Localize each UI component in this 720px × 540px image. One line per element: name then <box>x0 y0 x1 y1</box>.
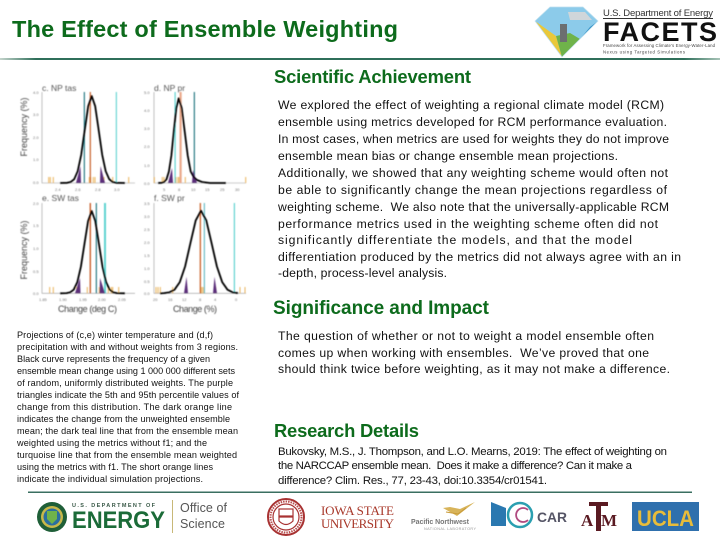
chart: d. NP pr: 8 <box>178 187 181 192</box>
logo text: tagline <box>603 43 716 54</box>
text block: figure caption: Projections of (c,e) winter temperature and (d,f) <box>17 330 213 340</box>
chart: d. NP pr: 30 <box>235 187 240 192</box>
chart: c. NP tas: 2.8 <box>95 187 101 192</box>
chart: d. NP pr: 3.0 <box>144 126 150 131</box>
text block: achievement: ensemble using metrics developed for RCM performance evaluation. <box>278 115 667 129</box>
chart: f. SW pr: 1.0 <box>144 266 150 271</box>
text block: figure caption: weighted using the metrics without f1; and the <box>16 438 207 448</box>
text block: achievement: -depth, process-level analysis. <box>278 266 447 280</box>
chart: c. NP tas: 3.0 <box>114 187 120 192</box>
chart: c. NP tas: 4.0 <box>33 90 39 95</box>
chart: f. SW pr: 3.5 <box>144 201 150 206</box>
chart: f. SW pr: 0.0 <box>144 291 150 296</box>
chart: c. NP tas <box>33 83 135 192</box>
chart: e. SW tas: 2.00 <box>98 297 107 302</box>
logo text: Office of Science: Science <box>180 517 225 531</box>
text block: achievement: be able to significantly change the mean projections regardless of <box>278 183 668 197</box>
chart: e. SW tas: 1.85 <box>39 297 48 302</box>
chart: d. NP pr: 2.0 <box>144 144 150 149</box>
chart: f. SW pr: f. SW pr <box>154 193 185 203</box>
text block: achievement: significantly differentiate the models, and that the model <box>278 233 632 247</box>
panel: charts <box>19 83 246 314</box>
text block: achievement: performance metrics used in the weighting scheme often did not <box>278 217 659 231</box>
logo: Texas A&M <box>581 502 617 531</box>
logo: DOE Office of Science <box>37 500 228 534</box>
axis label: change deg C: Change (deg C) <box>58 304 117 314</box>
heading: Scientific Achievement: Scientific Achievement <box>274 66 471 87</box>
chart: c. NP tas: 3.0 <box>33 112 39 117</box>
chart: f. SW pr: 12 <box>182 297 187 302</box>
logo: UCLA: UCLA <box>637 506 694 531</box>
chart: d. NP pr: 1.0 <box>144 163 150 168</box>
chart: e. SW tas: e. SW tas <box>42 193 79 203</box>
chart: d. NP pr: 4.0 <box>144 108 150 113</box>
logo: Iowa State University <box>321 503 395 531</box>
text block: significance: comes up when working with ensembles. We’ve proved that one <box>278 346 649 360</box>
chart: f. SW pr: 1.5 <box>144 253 150 258</box>
chart: d. NP pr: 5.0 <box>144 90 150 95</box>
chart: f. SW pr: 2.0 <box>144 240 150 245</box>
text block: citation <box>278 446 667 487</box>
logo: NCAR <box>491 502 567 527</box>
chart: e. SW tas: 0.5 <box>33 269 39 274</box>
chart: c. NP tas: 0.0 <box>33 180 39 185</box>
text block: achievement: weighting scheme. We also note that the universally-applicable RCM <box>277 200 669 214</box>
header rule <box>0 58 720 60</box>
chart: f. SW pr: 0.5 <box>144 279 150 284</box>
text block: significance: The question of whether or not to weight a model ensemble often <box>278 329 654 343</box>
text block: figure caption: mean; the dark teal line that from the ensemble mean <box>17 426 238 436</box>
text block: achievement: We explored the effect of weighting a regional climate model (RCM) <box>278 98 664 112</box>
text block: achievement: ensemble mean bias or change ensemble mean projections. <box>278 149 618 163</box>
chart: c. NP tas: 2.4 <box>55 187 61 192</box>
chart: e. SW tas: 2.0 <box>33 201 39 206</box>
logo text: FACETS: FACETS <box>603 17 717 47</box>
axis label: frequency top: Frequency (%) <box>19 97 29 157</box>
logo: Iowa State University: IOWA STATE <box>321 503 394 518</box>
logo: Pacific Northwest: Pacific Northwest <box>411 519 470 526</box>
heading: Significance and Impact: Significance and Impact <box>273 298 490 319</box>
logo text: tagline: Nexus using Targeted Simulations <box>603 50 685 54</box>
text block: citation: Bukovsky, M.S., J. Thompson, and L.O. Mearns, 2019: The effect of weighting on <box>278 446 667 458</box>
axis label: frequency bottom: Frequency (%) <box>19 220 29 280</box>
chart: f. SW pr <box>144 193 246 302</box>
logo text: tagline: Framework for Assessing Climate's Energy-Water-Land <box>603 43 716 48</box>
chart: e. SW tas: 1.95 <box>79 297 88 302</box>
logo text: U.S. Department of: U.S. DEPARTMENT OF <box>72 503 156 509</box>
text block: figure caption: using the metrics with f1. The short orange lines <box>17 462 213 472</box>
text block: citation: difference? Clim. Res., 77, 23-43, doi:10.3354/cr01541. <box>278 475 547 487</box>
text block: figure caption: change from this distribution. The dark orange line <box>17 402 232 412</box>
chart: c. NP tas: 1.0 <box>33 157 39 162</box>
text block: significance <box>278 329 670 376</box>
logo text: ENERGY: ENERGY <box>72 507 165 534</box>
logo: Pacific Northwest: NATIONAL LABORATORY <box>424 527 476 531</box>
chart: d. NP pr: 0.0 <box>144 181 150 186</box>
text block: figure caption: of random, uniformly distributed weights. The purple <box>17 378 233 388</box>
logo: Pacific Northwest <box>411 502 476 531</box>
chart: d. NP pr: 5 <box>163 187 166 192</box>
chart: e. SW tas: 1.90 <box>59 297 68 302</box>
chart: e. SW tas: 2.05 <box>118 297 127 302</box>
text block: achievement: differentiation produced by the metrics did not always agree with an in <box>278 250 681 264</box>
logo text: U.S. Department of Energy: U.S. Department of Energy <box>603 8 713 19</box>
text block: figure caption: turquoise line that from the ensemble mean weighted <box>17 450 237 460</box>
logo: NCAR: CAR <box>537 509 567 525</box>
logo: Iowa State University: UNIVERSITY <box>321 516 395 531</box>
logo: Cornell seal <box>268 499 304 535</box>
text block: figure caption: indicate the individual simulation projections. <box>17 474 203 484</box>
text block: significance: should think twice before weighting, as it may not make a difference. <box>278 362 670 376</box>
logo: Texas A&M: A M <box>581 511 617 530</box>
text block: figure caption: Black curve represents the frequency of a given <box>17 354 210 364</box>
chart: e. SW tas <box>33 193 135 302</box>
chart: d. NP pr: 10 <box>191 187 196 192</box>
text block: achievement: Additionally, we showed that any weighting scheme would often not <box>278 166 669 180</box>
chart: f. SW pr: 0 <box>235 297 238 302</box>
chart: c. NP tas: c. NP tas <box>42 83 76 93</box>
logo text: Office of Science: Office of <box>180 501 228 515</box>
text block: figure caption: indicates the change from the unweighted ensemble <box>17 414 230 424</box>
logo text: Office of Science <box>180 501 228 531</box>
text block: figure caption: triangles indicate the 5th and 95th percentile values of <box>17 390 239 400</box>
title: The Effect of Ensemble Weighting <box>12 16 398 42</box>
chart: c. NP tas: 2.0 <box>33 135 39 140</box>
chart: f. SW pr: 4 <box>214 297 217 302</box>
chart: f. SW pr: 8 <box>199 297 202 302</box>
text block: citation: the NARCCAP ensemble mean. Does it make a difference? Can it make a <box>278 460 633 472</box>
chart: e. SW tas: 1.0 <box>33 246 39 251</box>
logo: FACETS <box>535 7 717 57</box>
chart: e. SW tas: 0.0 <box>33 291 39 296</box>
chart: d. NP pr: 15 <box>205 187 210 192</box>
icon: FACETS diamond <box>535 7 598 57</box>
text block: figure caption: precipitation with and without weights from 3 regions. <box>17 342 238 352</box>
axis label: change percent: Change (%) <box>173 304 217 314</box>
chart: c. NP tas: 2.6 <box>75 187 81 192</box>
text block: figure caption <box>16 330 239 484</box>
footer rule <box>28 492 692 493</box>
chart: f. SW pr: 16 <box>168 297 173 302</box>
chart: d. NP pr <box>144 83 246 192</box>
chart: f. SW pr: 3.0 <box>144 214 150 219</box>
icon: DOE seal <box>37 502 67 532</box>
text block: figure caption: ensemble mean change using 1 000 000 different sets <box>17 366 235 376</box>
chart: d. NP pr: 25 <box>220 187 225 192</box>
chart: f. SW pr: 2.5 <box>144 227 150 232</box>
chart: f. SW pr: 20 <box>153 297 158 302</box>
text block: achievement: In most cases, when metrics are used for weights they do not improve <box>278 132 669 146</box>
heading: Research Details: Research Details <box>274 420 419 441</box>
text block: achievement <box>277 98 681 280</box>
chart: d. NP pr: d. NP pr <box>154 83 185 93</box>
chart: e. SW tas: 1.5 <box>33 223 39 228</box>
